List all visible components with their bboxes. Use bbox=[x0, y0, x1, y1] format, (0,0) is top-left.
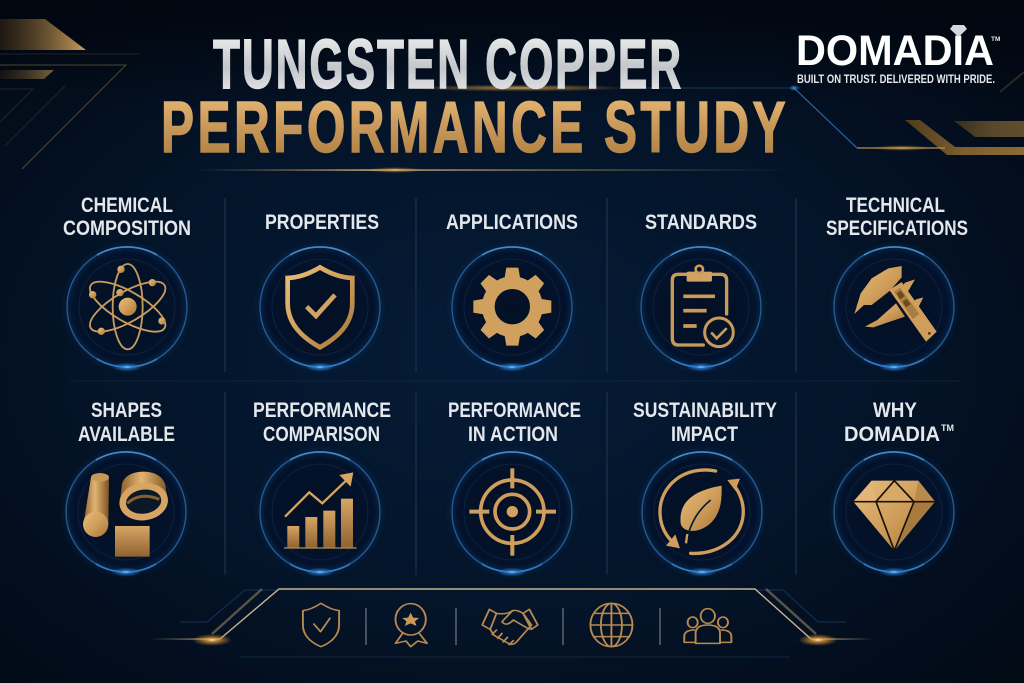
heading: PERFORMANCE bbox=[253, 399, 391, 422]
heading: SUSTAINABILITY bbox=[633, 399, 777, 422]
top-right gold decoration bbox=[789, 72, 1024, 155]
panel: shapes available bbox=[65, 399, 187, 576]
heading: TM bbox=[941, 423, 954, 433]
heading bbox=[448, 399, 581, 446]
panel: performance comparison bbox=[253, 399, 391, 576]
top-left gold decoration bbox=[0, 19, 140, 169]
ring bbox=[833, 246, 955, 372]
heading bbox=[633, 399, 777, 446]
icon: award rosette bbox=[396, 604, 427, 647]
heading: SHAPES bbox=[91, 399, 162, 422]
heading bbox=[63, 194, 191, 240]
heading: AVAILABLE bbox=[78, 423, 175, 446]
title line 1: TUNGSTEN COPPER bbox=[213, 25, 683, 103]
icon: atom bbox=[83, 264, 172, 349]
icon: target bbox=[469, 468, 556, 556]
icon: handshake bbox=[482, 609, 538, 645]
heading: COMPARISON bbox=[263, 423, 380, 446]
ring bbox=[66, 246, 188, 372]
heading: STANDARDS bbox=[645, 211, 757, 234]
icon: people bbox=[684, 609, 731, 643]
panel: performance in action bbox=[448, 399, 581, 576]
icon: globe bbox=[590, 603, 632, 647]
heading: PERFORMANCE bbox=[448, 399, 581, 422]
icon: caliper bbox=[854, 266, 937, 342]
heading: SPECIFICATIONS bbox=[826, 217, 968, 240]
panel: technical specifications bbox=[826, 194, 968, 372]
heading: COMPOSITION bbox=[63, 217, 191, 240]
heading bbox=[826, 194, 968, 240]
heading: TECHNICAL bbox=[846, 194, 945, 217]
panel: sustainability impact bbox=[633, 399, 777, 576]
ring bbox=[451, 451, 573, 576]
heading bbox=[844, 399, 954, 446]
ring bbox=[451, 246, 573, 372]
panel: standards bbox=[640, 211, 762, 372]
ring bbox=[641, 451, 763, 576]
icon: shield bbox=[303, 603, 339, 647]
panel: why domadia bbox=[833, 399, 955, 576]
icon: clipboard with check bbox=[672, 266, 733, 347]
heading: CHEMICAL bbox=[81, 194, 173, 217]
heading: IN ACTION bbox=[468, 423, 558, 446]
ring bbox=[259, 246, 381, 372]
icon: rising bar chart bbox=[284, 472, 357, 548]
icon: shield with check bbox=[288, 267, 352, 347]
panel: properties bbox=[259, 211, 381, 372]
heading: APPLICATIONS bbox=[446, 211, 578, 234]
bottom frame bbox=[150, 589, 875, 657]
title underline bbox=[195, 167, 790, 173]
logo diamond bbox=[950, 25, 967, 37]
panel: applications bbox=[446, 211, 578, 372]
heading: DOMADIA bbox=[844, 423, 940, 446]
ring bbox=[259, 451, 381, 576]
heading bbox=[253, 399, 391, 446]
bottom dividers bbox=[366, 608, 660, 645]
icon: rod, ring and plate bbox=[83, 472, 168, 557]
heading: PROPERTIES bbox=[265, 211, 379, 234]
bottom icon row bbox=[303, 603, 731, 647]
icon: leaf with cycle arrows bbox=[660, 470, 743, 553]
logo wordmark: DOMADIA bbox=[796, 27, 994, 75]
heading: IMPACT bbox=[671, 423, 738, 446]
ring bbox=[640, 246, 762, 372]
ring bbox=[65, 451, 187, 576]
title bbox=[161, 25, 800, 168]
logo trademark: TM bbox=[991, 36, 1000, 43]
heading: WHY bbox=[873, 399, 917, 422]
logo bbox=[796, 25, 1000, 86]
heading bbox=[78, 399, 175, 446]
icon: gear bbox=[473, 268, 551, 346]
grid dividers bbox=[70, 198, 960, 575]
ring bbox=[833, 451, 955, 576]
panel: chemical composition bbox=[63, 194, 191, 372]
icon: diamond bbox=[853, 481, 935, 551]
